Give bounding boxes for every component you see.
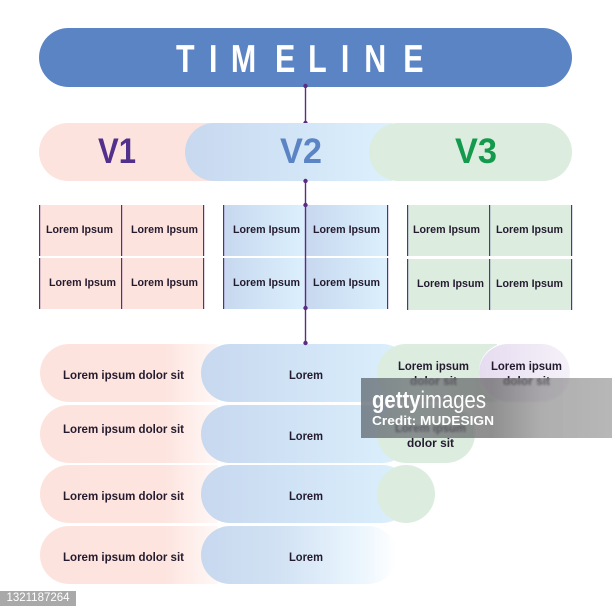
connector: versions to rows xyxy=(303,179,308,345)
green segment xyxy=(377,344,497,402)
title text: TIMELINE xyxy=(176,37,424,81)
row 2: Lorem ipsum xyxy=(395,421,466,435)
table: V1: Lorem Ipsum xyxy=(131,224,198,236)
table: V3: Lorem Ipsum xyxy=(417,278,484,290)
version header band xyxy=(39,123,572,181)
row 2 xyxy=(40,405,475,463)
row 1: Lorem xyxy=(289,368,323,382)
V3 pill: V3 xyxy=(455,132,497,171)
table: V3: Lorem Ipsum xyxy=(496,278,563,290)
watermark xyxy=(361,378,612,438)
image id tag xyxy=(0,591,76,606)
title bar xyxy=(39,28,572,87)
table: V1: Lorem Ipsum xyxy=(46,224,113,236)
green segment xyxy=(377,405,475,463)
connector: title to versions xyxy=(303,84,308,125)
row 2: Lorem xyxy=(289,429,323,443)
row 4: Lorem xyxy=(289,550,323,564)
table: V2: Lorem Ipsum xyxy=(233,224,300,236)
row 4 xyxy=(40,526,397,584)
table: V2 xyxy=(223,205,388,309)
table: V3 xyxy=(407,205,572,310)
table: V1: Lorem Ipsum xyxy=(131,277,198,289)
watermark logo text: gettyimages xyxy=(372,387,486,414)
V1 pill: V1 xyxy=(98,132,136,171)
V1 pill xyxy=(39,123,215,181)
V3 pill xyxy=(369,123,572,181)
row 1: Lorem ipsum xyxy=(398,359,469,373)
row 4: Lorem ipsum dolor sit xyxy=(63,550,184,564)
row 1: dolor sit xyxy=(503,374,550,388)
green segment xyxy=(377,465,435,523)
table: V1: Lorem Ipsum xyxy=(49,277,116,289)
row 1: dolor sit xyxy=(410,374,457,388)
purple segment xyxy=(479,344,570,402)
table: V2: Lorem Ipsum xyxy=(233,277,300,289)
table: V1 xyxy=(39,205,204,309)
row 2: dolor sit xyxy=(407,436,454,450)
image id tag: 1321187264 xyxy=(6,592,70,604)
row 3: Lorem xyxy=(289,489,323,503)
row 2: Lorem ipsum dolor sit xyxy=(63,422,184,436)
V2 pill: V2 xyxy=(280,132,322,171)
row 1: Lorem ipsum xyxy=(491,359,562,373)
row 3 xyxy=(40,465,435,523)
row 1: Lorem ipsum dolor sit xyxy=(63,368,184,382)
V2 pill xyxy=(185,123,392,181)
table: V3: Lorem Ipsum xyxy=(413,224,480,236)
table: V2: Lorem Ipsum xyxy=(313,224,380,236)
row 3: Lorem ipsum dolor sit xyxy=(63,489,184,503)
table: V3: Lorem Ipsum xyxy=(496,224,563,236)
watermark credit text: Credit: MUDESIGN xyxy=(372,413,494,428)
table: V2: Lorem Ipsum xyxy=(313,277,380,289)
row 1 xyxy=(40,344,570,402)
